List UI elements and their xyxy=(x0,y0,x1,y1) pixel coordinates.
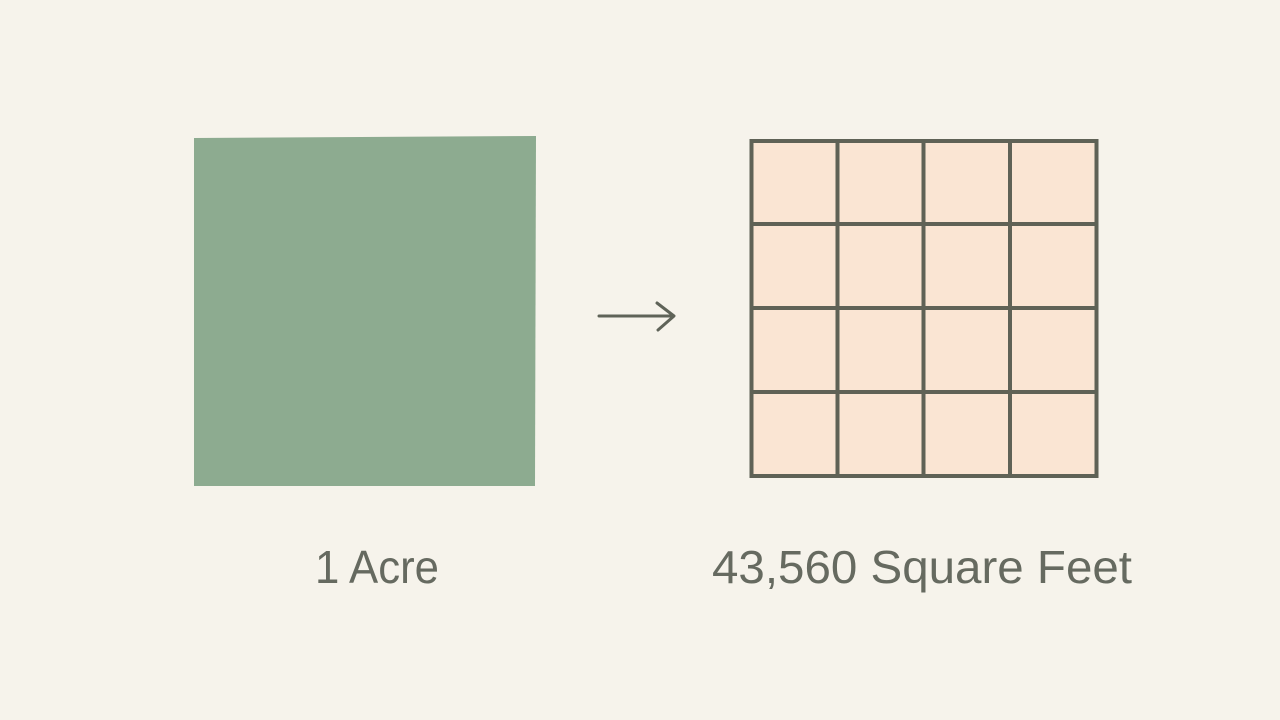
panel: 1 acre green square xyxy=(194,136,536,486)
label: 1 Acre: 1 Acre xyxy=(315,541,439,593)
panel: grid of square feet xyxy=(752,141,1096,476)
arrow xyxy=(599,303,674,330)
label: 43,560 Square Feet: 43,560 Square Feet xyxy=(712,541,1132,593)
